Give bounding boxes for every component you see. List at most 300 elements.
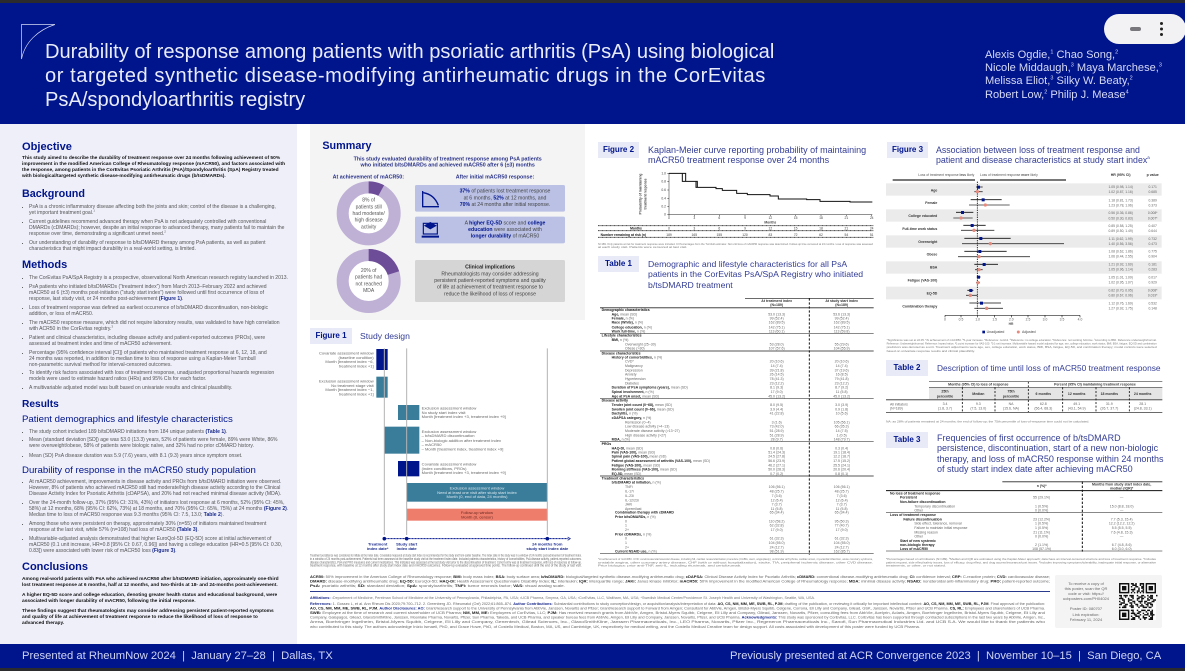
study start index values: 20.6 (20.4) — [833, 468, 850, 472]
row: all initiators: (56.4, 68.3) — [1034, 406, 1052, 410]
list: background: characteristics that might impact durability in a real-world setting, is limited. — [29, 246, 196, 252]
direction headers — [893, 173, 1066, 180]
list: background: DMARDs (cDMARDs); however, despite an initial response to advanced therapy, many patients fail to maintain the — [29, 225, 284, 231]
abbreviations — [310, 575, 1050, 588]
title: table 3: Frequencies of first occurrence of b/tsDMARD — [937, 433, 1121, 443]
row labels: MDA, n (%) — [612, 438, 630, 442]
axis labels: 24 — [870, 216, 874, 220]
row labels: Female, n (%) — [612, 317, 634, 321]
row: all initiators: 49.1 — [1073, 402, 1080, 406]
axis labels: 0.2 — [661, 205, 666, 209]
number at risk table: 120 — [742, 233, 748, 237]
table header: (N=189) — [835, 303, 848, 307]
list: methods: Percentage (95% confidence interval [CI]) of patients who maintained treatment response at 6, 12, 18, and — [29, 350, 267, 356]
row labels: Race (White), n (%) — [612, 321, 643, 325]
column heading: after initial response: After initial mACR50 response: — [456, 174, 534, 180]
treatment index values: 24.5 (27.8) — [768, 455, 785, 459]
number at risk table: 51 — [870, 233, 874, 237]
row values: 0 (0.0%) — [1035, 509, 1048, 513]
window labels: treatment index +1] — [339, 364, 374, 368]
row labels: Full-time work status — [902, 227, 937, 231]
footnote: figure 3: based on univariate response results and clinical plausibility. — [887, 349, 975, 353]
header: Months from study start index date, — [1092, 482, 1151, 486]
HR and p value columns: 0.56 (0.36, 0.86) — [1108, 211, 1133, 215]
row values: 21 (11.1%) — [1033, 530, 1050, 534]
poster link text: To receive a copy of — [1068, 581, 1104, 586]
chip: figure 2: Figure 2 — [603, 145, 634, 154]
footnote: figure 1: disease characteristics, PsA and PRO measures and current medications. This indicates was assessed at the last study visit prior to the discontinuation of treatment. Cohort entry was at treatment response, with loss of response at follow-up. — [310, 560, 582, 564]
study start index values: 10 (5.6) — [836, 412, 848, 416]
list: methods: response, last study visit, or 24 months post-achievement (Figure 1). — [29, 296, 183, 302]
list: methods: The mACR50 response measure, which did not require laboratory results, was validated to have high correlation — [29, 320, 280, 326]
row labels: 0 — [625, 519, 627, 523]
adjusted estimates — [953, 190, 1064, 310]
study start index values: 8.7 (9.2) — [835, 386, 848, 390]
row values: 7.6 (4.8, 15.3) — [1111, 530, 1133, 534]
list: durability: mACR50 (0.1 unit increase, HR=0.8 [95% CI: 0.67, 0.96]) and having a college education (HR=0.5 [95% CI: 0.30, — [29, 542, 282, 548]
HR and p value columns: 1.05 (0.98, 1.14) — [1108, 185, 1133, 189]
donut: 20% not reached MDA: 20% of — [361, 268, 377, 274]
study start index values: 95 (50.3) — [835, 519, 849, 523]
heading: results: Results — [22, 399, 59, 410]
title: PsA/spondyloarthritis registry — [45, 89, 305, 111]
window labels: Month [treatment index +3, treatment index +9] — [422, 470, 506, 475]
callout: clinical implications — [415, 260, 565, 302]
icon: laptop with graduation cap — [422, 223, 439, 237]
row labels: Persistent — [900, 496, 918, 500]
list: demographics: Mean (standard deviation [SD]) age was 53.0 (13.3) years, 52% of patients were female, 89% were White, 86% — [29, 437, 278, 443]
treatment index values: 51.4 (24.3) — [768, 451, 785, 455]
treatment index values: 99 (52.4) — [770, 317, 784, 321]
column headers: p value — [1147, 173, 1159, 177]
study start index values: 7 (3.7) — [837, 503, 847, 507]
row labels: PROs — [602, 442, 611, 446]
row values: 12.2 (12.2, 12.2) — [1109, 522, 1135, 526]
number at risk table: 6 — [718, 226, 720, 230]
study start index values: 25.5 (24.1) — [833, 463, 850, 467]
HR and p value columns: 1.18 (0.81, 1.73) — [1108, 198, 1133, 202]
list: methods: Loss of treatment response was defined as earliest occurrence of b/tsDMARD discontinuation, non-biologic — [29, 305, 268, 311]
axis labels: 0.4 — [661, 196, 666, 200]
row values: — — [1120, 496, 1124, 500]
title: table 3: of study start index date after achieving mACR50 — [937, 464, 1133, 474]
row labels: Apremilast — [625, 507, 642, 511]
treatment index values: 23 (12.2) — [770, 381, 784, 385]
table header: At treatment index — [761, 299, 792, 303]
row labels: Current NSAID use, n (%) — [615, 550, 657, 554]
row labels: Disease characteristics — [602, 351, 641, 355]
table 3 — [886, 481, 1162, 568]
HR and p value columns: 0.82 (0.70, 0.95) — [1108, 288, 1133, 292]
title: figure 2: mACR50 treatment response over 24 months — [648, 155, 829, 165]
treatment index values: 50.0 (28.3) — [768, 468, 785, 472]
row labels: Anxiety — [625, 373, 637, 377]
row: all initiators: NA — [1009, 402, 1014, 406]
list: methods: assessed at treatment index and time of mACR50 achievement. — [29, 341, 172, 347]
HR and p value columns: 1.11 (0.62, 1.99) — [1109, 237, 1133, 241]
row values: 15.0 (8.8, 18.0) — [1110, 504, 1134, 508]
treatment index values: 39 (21.8) — [770, 368, 784, 372]
HR and p value columns: 0.50 (0.30, 0.83) — [1108, 216, 1133, 220]
column heading: at achievement: At achievement of mACR50: — [333, 174, 404, 180]
axis labels: 0 — [668, 216, 670, 220]
row labels: Other — [914, 535, 924, 539]
study start index values: 11 (5.8) — [836, 390, 848, 394]
HR and p value columns: 0.929 — [1148, 281, 1157, 285]
title: figure 3: patient and disease characteristics at study start indexa — [936, 155, 1150, 165]
timeline labels: Treatment — [368, 542, 388, 546]
footnote: figure 3: Reference: Underweight/normal. Reference: hazard ratios. ᵍ1-point increase for VAS-100. ʰ0.1-unit increase. Multivariable hazard model adjusted for age, sex, college education, work status, BMI, BSA, fatigue, EQ-5D and combination — [887, 342, 1157, 346]
footnote: table 1 — [598, 557, 873, 568]
row labels: 2+ — [625, 545, 629, 549]
text: objective: the response, among patients in the CorEvitas Psoriatic Arthritis (PsA)/Spondyloarthritis (SpA) Registry treated — [22, 168, 279, 173]
row labels: Diabetes — [625, 381, 639, 385]
row labels: Temporary discontinuation — [914, 504, 955, 508]
footnote: table 2: NA: as 28% of patients remained at 24 months; the end of follow-up; the 75th percentile of loss-of-response time could not be calculated. — [886, 420, 1090, 424]
HR and p value columns: 0.373 — [1148, 203, 1157, 207]
summary content — [322, 140, 565, 313]
row labels: BMI, n (%) — [612, 338, 628, 342]
legend — [982, 330, 1036, 334]
number at risk table: 18 — [819, 226, 823, 230]
list: background: yet important treatment goal.1 — [29, 208, 95, 216]
number at risk table: 83 — [768, 233, 772, 237]
window labels: Covariate assessment window — [319, 350, 374, 356]
axis labels: 1.0 — [661, 171, 666, 175]
text: conclusions: These findings suggest that rheumatologists may consider addressing persistent patient-reported symptoms — [22, 609, 274, 614]
row labels: Fatigue (VAS-100), mean (SD) — [612, 463, 660, 467]
row labels: Side effect, tolerance, removal — [914, 522, 962, 526]
header: n (%)* — [1037, 484, 1047, 488]
row: all initiators: All initiators — [890, 402, 908, 406]
number at risk table: 3 — [693, 226, 695, 230]
row labels: IL-17i — [625, 490, 634, 494]
footnote: table 3: treatments, or other, or not stated. — [886, 564, 946, 568]
treatment index values: 107 (57.6) — [769, 347, 785, 351]
window labels: (index conditions, PROs) — [422, 466, 467, 471]
text: objective: with biological/targeted synthetic disease-modifying antirheumatic drugs (b/tsDMARDs). — [22, 174, 226, 179]
row: all initiators: 9.3 — [976, 402, 981, 406]
row labels: Depression — [625, 368, 643, 372]
row labels: College educated — [908, 214, 937, 218]
row labels — [902, 188, 938, 308]
axis: 3.0 — [1043, 317, 1047, 321]
title: table 1: b/tsDMARD treatment — [648, 280, 733, 290]
top dark strip — [0, 0, 1185, 3]
donut: 20% not reached MDA: patients had — [355, 275, 383, 281]
chip: figure 1: Figure 1 — [315, 331, 347, 340]
footnote: table 1: Prior biologics: prior anti-TNF, anti-IL, including rituximab, and certolizumab. — [598, 564, 742, 568]
treatment index values: 162 (89.5) — [769, 321, 785, 325]
axis: 1.0 — [975, 317, 980, 321]
title: table 1: patients in the CorEvitas PsA/SpA Registry who initiated — [648, 269, 863, 279]
HR and p value columns: 1.05 (0.96, 1.14) — [1108, 268, 1133, 272]
axis labels: treatment response — [644, 178, 648, 209]
study start index values: 19.1 (18.4) — [833, 451, 850, 455]
row labels: HAQ-DI, mean (SD) — [612, 446, 643, 450]
title: figure 3: Association between loss of treatment response and — [936, 145, 1140, 155]
row labels: Prior b/tsDMARDs, n (%) — [615, 515, 656, 519]
HR and p value columns: 1.40 (0.56, 3.56) — [1108, 242, 1133, 246]
panel: summary — [310, 124, 585, 320]
axis: 4.0 — [1078, 317, 1082, 321]
list: durability: 58%) at 12 months, 68% (95% CI: 62%, 73%) at 18 months, and 70% (95% CI: 65%, 75%) at 24 months (Figure 2). — [29, 506, 288, 512]
treatment index values: 12 (6.4) — [771, 498, 783, 502]
treatment index values: 106 (56.1) — [769, 485, 785, 489]
list: methods: The CorEvitas PsA/SpA Registry is a prospective, observational North American research registry launched in 2013. — [29, 275, 288, 281]
text: conclusions — [22, 576, 279, 626]
HR and p value columns: 0.389 — [1148, 198, 1157, 202]
list: methods: Patient and clinical characteristics, including disease activity and patient-reported outcomes (PROs), were — [29, 335, 265, 341]
footnote: figure 2: N=189. Only patients at risk for treatment response were included. CI Percentages from the Turnbull estimator. Not until loss of mACR50 response was determined. Follow-up time censored at 24 months. Loss of response was assessed — [598, 242, 874, 246]
legend: Adjusted — [1022, 330, 1036, 334]
axis labels: Probability of maintaining — [639, 174, 643, 214]
HR and p value columns: 0.407 — [1148, 224, 1157, 228]
references and disclosures — [310, 602, 1045, 629]
treatment index values: 0.7 (0.2) — [770, 472, 783, 476]
title: figure 2 — [648, 145, 866, 165]
treatment index values: 62 (32.8) — [770, 524, 784, 528]
heading: objective: Objective — [22, 141, 72, 153]
list: durability: 0.83]) were associated with lower risk of mACR50 loss (Figure 3). — [29, 548, 177, 554]
text: conclusions: lost treatment response at 6 months, half at 12 months, and two-thirds at 18- and 24-months post-achievement. — [22, 583, 278, 588]
list: demographics — [22, 429, 278, 459]
HR and p value columns: 0.007* — [1148, 216, 1158, 220]
callout: EQ-5D and college education — [415, 217, 565, 243]
chip: table 2: Table 2 — [894, 363, 920, 372]
study start index values: 17.5 (15.2) — [833, 459, 850, 463]
header text: 25th — [941, 390, 949, 394]
study start index values: 162 (89.5) — [834, 321, 850, 325]
outcome window labels — [437, 486, 517, 520]
study start index values: 11 (5.8) — [836, 507, 848, 511]
title: figure 1: Study design — [360, 331, 410, 341]
window labels: Month [treatment index −6, — [325, 359, 374, 364]
footnote: table 1: *At achievement of mACR50. CVD: cerebrovascular/vascular disease, including MI, cardiac revascularization procedure (CABG, stent, angioplasty), ventricular arrhythmia, cardiac arrest, myocardial infarction, acute coronary syndrome, — [598, 557, 873, 561]
axis labels: 9 — [744, 216, 746, 220]
donut: 20% not reached MDA: MDA — [363, 288, 375, 294]
outcome window labels: Follow-up window — [461, 510, 493, 515]
authors: Melissa Eliot,3 Silky W. Beaty,2 — [985, 75, 1133, 87]
text: conclusions: and quality of life at achievement of treatment response to reduce the likelihood of loss of response to — [22, 615, 258, 620]
row values: 0 (0.0%) — [1035, 535, 1048, 539]
treatment index values: 73 (42.0) — [770, 425, 784, 429]
references and disclosures: Arena, Boehringer Ingelheim, Bristol-Myers Squibb, Celgene, Eli Lilly and Company, Genentech, Gilead Sciences, Inc., GlaxoSmithKline, Janssen Pharmaceuticals, Inc., LEO Pharma, Novartis, Pfizer Inc., Regeneron Pharmaceuticals Inc., Sanofi, Sun Pharmaceutical Industries Ltd. and UCB S.A. We would like to thank the patients who — [310, 620, 1045, 624]
HR and p value columns: 1.08 (0.62, 1.86) — [1108, 250, 1133, 254]
axis: 1.5 — [992, 317, 997, 321]
number at risk table: 54 — [844, 233, 848, 237]
list: durability: Disease Activity Index for Psoriatic Arthritis (cDAPSA), and 20% had not reached minimal disease activity (MDA). — [29, 491, 281, 497]
outcome window labels: Need at least one visit after study start index — [437, 490, 517, 495]
row labels: Disease activity — [602, 399, 628, 403]
header text: Median — [972, 392, 984, 396]
treatment index values: 41 (22.8) — [770, 412, 784, 416]
row labels: Demographic characteristics — [602, 308, 650, 312]
row labels: Swollen joint count (0−66), mean (SD) — [612, 407, 674, 411]
row labels: Female — [925, 201, 937, 205]
row labels: Missing reason — [914, 530, 938, 534]
row: all initiators: (1.8, 3.7) — [938, 406, 952, 410]
study start index values: 14 (7.4) — [836, 364, 848, 368]
HR and p value columns: 0.732 — [1148, 237, 1157, 241]
HR and p value columns: 0.473 — [1148, 242, 1157, 246]
header text: percentile — [1003, 394, 1019, 398]
row: all initiators: 62.8 — [1040, 402, 1047, 406]
treatment index values: 28 (9.7) — [771, 438, 783, 442]
header text: 75th — [1007, 390, 1015, 394]
title: table 3: persistence, discontinuation, start of a new non-biologic — [937, 443, 1158, 453]
heading: conclusions: Conclusions — [22, 561, 88, 573]
text: conclusions: Among real-world patients with PsA who achieved mACR50 after b/tsDMARD initiation, approximately one-third — [22, 577, 279, 582]
callout: clinical implications: Clinical implications — [465, 265, 515, 271]
row: all initiators: (43.1, 54.9) — [1068, 406, 1086, 410]
study start index values: 37 (19.6) — [835, 368, 849, 372]
treatment index values: 110 (58.2) — [769, 519, 785, 523]
treatment index values: 104 (55.0) — [769, 541, 785, 545]
column headers — [1111, 173, 1159, 177]
treatment index values: 11 (5.8) — [771, 507, 783, 511]
title — [45, 41, 774, 111]
footnote: figure 1 — [310, 554, 582, 568]
treatment index values: 8.1 (9.3) — [770, 386, 783, 390]
authors: Nicole Middaugh,3 Maya Marchese,3 — [985, 62, 1162, 74]
study start index values: 0.3 (0.4) — [835, 446, 848, 450]
figure 2: Kaplan-Meier curve — [598, 171, 874, 249]
table rules — [600, 298, 874, 555]
window labels: Exclusion assessment window — [422, 429, 476, 434]
HR and p value columns: 1.06 (0.44, 2.55) — [1108, 255, 1133, 259]
header — [1037, 482, 1151, 490]
chip: table 3 — [886, 432, 928, 448]
list: demographics: were overweight/obese, 58% of patients were biologic naïve, and 32% had no prior cDMARD history. — [29, 443, 254, 449]
row labels: IL-12/23i — [625, 498, 639, 502]
authors — [985, 48, 1162, 101]
rules — [886, 482, 1162, 552]
HR and p value columns: 0.685 — [1148, 190, 1157, 194]
study start index values: 12 (6.4) — [836, 498, 848, 502]
timeline axis — [382, 537, 570, 540]
list: demographics: The study cohort included 189 b/tsDMARD initiations from 184 unique patients (Table 1). — [29, 429, 227, 435]
treatment index values: 17 (9.0) — [771, 528, 783, 532]
window labels: Covariate assessment window — [422, 462, 476, 466]
window labels: No study start index visit — [422, 410, 466, 415]
list: durability: Median time to loss of mACR50 response was 9.3 months (95% CI: 7.5, 13.0; Table 2). — [29, 512, 224, 518]
heading: summary: Summary — [322, 140, 372, 152]
poster link text: ucbposters.com/PH04024 — [1063, 596, 1109, 601]
treatment index values: 61 (32.3) — [770, 537, 784, 541]
treatment index values: 3 (1.6) — [772, 420, 782, 424]
HR and p value columns: 0.644 — [1148, 229, 1157, 233]
header: median (IQR)* — [1110, 486, 1134, 490]
HR and p value columns: 0.017 — [1148, 275, 1157, 279]
row labels: No loss of treatment response — [890, 491, 940, 495]
row values: 1 (0.5%) — [1035, 504, 1048, 508]
study start index values: 79 (41.8) — [835, 377, 849, 381]
text: conclusions: associated with longer durability of mACR50, following the initial response. — [22, 599, 196, 604]
study start index values: 16 (8.5) — [836, 373, 848, 377]
references and disclosures: Company, Galapagos, Gilead, GlaxoSmithKline, Janssen, Moonlake Pharma, Novartis, Pfizer, Sun Pharma, Takeda, and UCB Pharma, and speaker bureau fees from AbbVie, Amgen, Eli Lilly and Company, Janssen, Novartis, Pfizer, and UCB Pharma. Acknowledgments: This study was sponsored by CorEvitas, LLC. CorEvitas has been supported through contracted subscriptions in the last two years by AbbVie, Amgen, Inc., — [310, 616, 1045, 620]
HR and p value columns: 1.21 (0.92, 1.60) — [1108, 262, 1133, 266]
list: durability: Over the 24-month follow-up, 37% (95% CI: 31%, 43%) of initiators lost response at 6 months, 52% (95% CI: 45%, — [29, 500, 285, 506]
row stripes — [886, 183, 1162, 299]
number at risk table: 0 — [668, 226, 670, 230]
QR code — [1119, 583, 1158, 620]
list: methods: addition, or loss of mACR50. — [29, 311, 93, 317]
window labels: – Non-biologic addition after treatment index — [422, 438, 501, 443]
callout: EQ-5D and college education: education were associated with — [468, 227, 542, 233]
study start index values: 104 (55.9) — [834, 347, 850, 351]
row: all initiators: 31.9 — [1106, 402, 1113, 406]
treatment index values: 98 (51.9) — [770, 550, 784, 554]
row labels: Loss of mACR50 — [900, 547, 928, 551]
row values: — — [1120, 509, 1124, 513]
study start index values: 99 (52.4) — [835, 317, 849, 321]
row labels: Start of new systemic — [900, 539, 936, 543]
study start index values: 148 (79.7) — [834, 438, 850, 442]
row labels: EQ-5D — [927, 292, 938, 296]
row labels — [602, 308, 710, 554]
chip: figure 2 — [598, 142, 639, 158]
chip: table 3: Table 3 — [894, 435, 920, 444]
number at risk table: Number remaining at risk (n) — [601, 233, 646, 237]
axis labels: 6 — [718, 216, 720, 220]
row labels: Non-failure discontinuation — [900, 500, 946, 504]
row: all initiators: 3.4 — [943, 402, 947, 406]
study start index values: 0.8 (0.1) — [835, 472, 848, 476]
authors: Robert Low,2 Philip J. Mease4 — [985, 89, 1129, 101]
row labels: Spinal involvement, n (%) — [612, 390, 654, 394]
timeline labels: Study start — [396, 542, 418, 546]
row labels: 1 — [625, 541, 627, 545]
row labels: TNFi — [625, 485, 633, 489]
HR and p value columns: 0.775 — [1148, 250, 1157, 254]
callout: loss of response — [415, 185, 565, 212]
study start index values: 104 (55.0) — [834, 541, 850, 545]
row values: 1 (0.5%) — [1035, 522, 1048, 526]
text: objective — [22, 156, 285, 179]
row labels: Malignancy — [625, 364, 643, 368]
row labels: Prior cDMARDs, n (%) — [615, 532, 651, 536]
donut: 8% moderate/high disease activity: patients still — [356, 204, 382, 210]
timeline labels: index date — [397, 546, 417, 551]
list: methods: models were used to estimate hazard ratios (HRs) and 95% CIs for each factor. — [29, 376, 206, 382]
row labels: Overweight (25−30) — [625, 342, 656, 346]
axis labels: 0 — [664, 213, 666, 217]
axis: 0 — [944, 317, 946, 321]
study start index values: 24 (12.7) — [835, 545, 849, 549]
HR and p value columns: 1.05 (1.01, 1.09) — [1108, 275, 1133, 279]
list: background: Our understanding of durability of response to b/tsDMARD therapy among PsA patients, as well as patient — [29, 240, 266, 246]
treatment index values: 45.0 (13.2) — [768, 394, 785, 398]
row values: 2 (1.1%) — [1035, 543, 1048, 547]
donut: 8% moderate/high disease activity: high disease — [355, 218, 383, 224]
window labels: Exclusion assessment window — [422, 406, 476, 410]
window labels — [319, 350, 506, 475]
row: all initiators: (15.6, NA) — [1003, 406, 1019, 410]
callout: loss of response: 37% of patients lost treatment response — [460, 189, 551, 195]
title: table 2: Description of time until loss of mACR50 treatment response — [937, 363, 1161, 373]
callout: clinical implications: persistent patient-reported symptoms and quality — [434, 278, 546, 284]
row labels: Loss of treatment response — [890, 513, 936, 517]
header text — [937, 383, 1151, 398]
divider rule above affiliations — [310, 590, 1050, 592]
callout: loss of response: 70% at 24 months after initial response. — [460, 202, 550, 208]
HR and p value columns: 0.019* — [1148, 293, 1158, 297]
title: table 1: Demographic and lifestyle characteristics for all PsA — [648, 259, 847, 269]
window labels: Month [treatment index +3, treatment index +9] — [422, 414, 506, 419]
treatment index values — [768, 312, 785, 554]
list: background: Current guidelines recommend advanced therapy when PsA is not adequately controlled with conventional — [29, 219, 266, 225]
